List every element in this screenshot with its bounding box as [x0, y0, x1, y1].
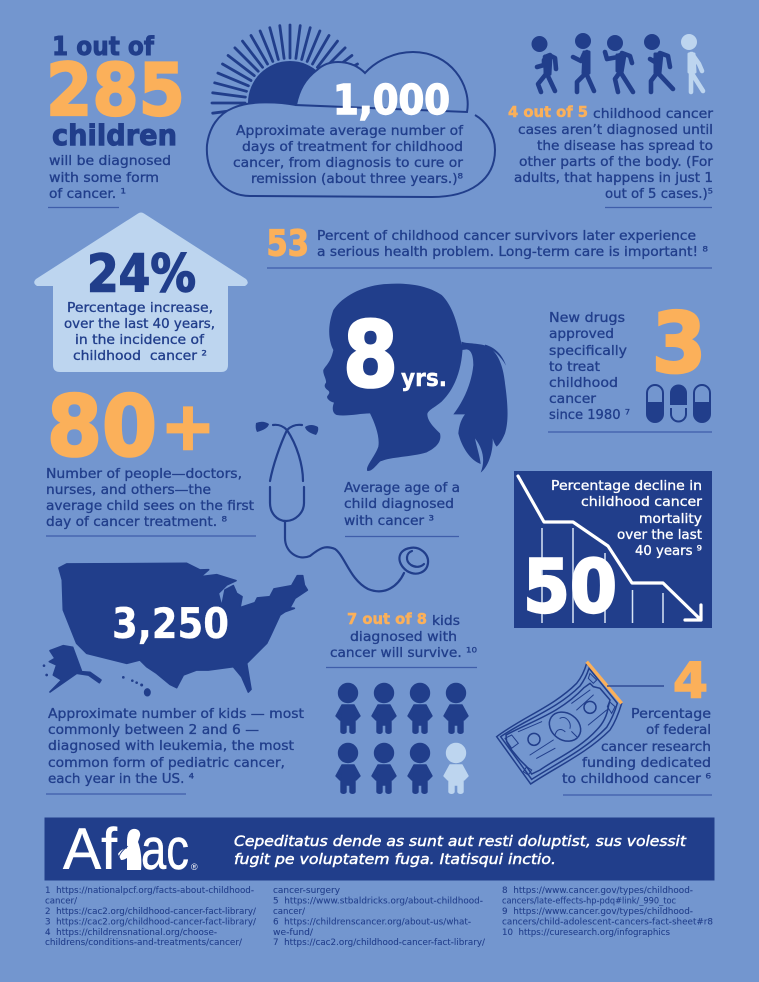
text: survivors description: a serious health problem. Long-term care is important! ⁸ [317, 245, 708, 260]
chart bars [542, 528, 663, 623]
panel: girl 8 yrs [323, 284, 508, 473]
big number: 3: 3 [652, 295, 706, 392]
footnotes: column three: 9 https://www.cancer.gov/types/childhood- [502, 906, 693, 917]
icon: sun rays behind cloud [212, 25, 358, 145]
icon: cloud outline [207, 52, 495, 197]
text: leukemia description: commonly between 2 and 6 — [48, 723, 259, 738]
panel: 3 new drugs [548, 295, 712, 432]
text: will be diagnosed: of cancer. ¹ [49, 187, 126, 202]
chart line arrow [518, 476, 701, 620]
logo: Aflac: ac [141, 817, 189, 882]
text: decline description: mortality [639, 512, 702, 527]
chart background [514, 471, 712, 628]
footnotes: column three [502, 885, 713, 938]
text: funding description [562, 707, 711, 787]
panel: 7 out of 8 kids [326, 610, 477, 793]
footnotes: column one: 1 https://nationalpcf.org/facts-about-childhood- [45, 885, 254, 896]
slogan: Cepeditatus dende as sunt aut resti doluptist, sus volessit [234, 834, 687, 850]
text: new drugs description: since 1980 ⁷ [549, 408, 630, 423]
text: decline description: 40 years ⁹ [635, 544, 702, 559]
big number: 53: 53 [266, 224, 309, 264]
big number: 4: 4 [673, 652, 708, 710]
icon: row of children bottom [336, 744, 468, 793]
text: new drugs description: cancer [549, 392, 597, 407]
text: leukemia description [48, 707, 304, 787]
text: 4 out of 5 description: other parts of the body. (For [519, 155, 714, 170]
footnotes: column one: 2 https://cac2.org/childhood-cancer-fact-library/ [45, 906, 257, 917]
text: 4 out of 5 description: 4 out of 5 [508, 103, 588, 121]
big symbol: plus: + [161, 388, 215, 465]
text: funding description: of federal [646, 723, 711, 738]
text: cloud description: Approximate average number of [236, 124, 463, 139]
panel: average age text [344, 481, 460, 536]
text: funding description: Percentage [631, 707, 711, 722]
text: decline description: childhood cancer [581, 495, 703, 510]
text: will be diagnosed: with some form [49, 171, 159, 186]
footnotes: column one: childrens/conditions-and-treatments/cancer/ [45, 937, 243, 948]
big number: 1,000: 1,000 [333, 76, 450, 124]
text: survivors description [317, 229, 708, 260]
big number: 24%: 24% [87, 244, 196, 304]
text: funding description: to childhood cancer ⁶ [562, 772, 711, 787]
footnotes: column two: 7 https://cac2.org/childhood-cancer-fact-library/ [273, 937, 486, 948]
banner background [44, 818, 714, 880]
text: funding description: cancer research [601, 740, 711, 755]
text: new drugs description: to treat [549, 360, 600, 375]
text: 4 out of 5 description: the disease has spread to [537, 139, 713, 154]
text: decline description: over the last [617, 528, 702, 543]
heading: children: children [52, 119, 177, 152]
logo: Aflac: Af [63, 817, 118, 882]
text: people description: average child sees on the first [46, 499, 254, 514]
footnotes: column three: cancers/child-adolescent-cancers-fact-sheet#r8 [502, 916, 713, 928]
text: incidence description: childhood cancer ² [73, 349, 207, 364]
banner: Aflac [44, 817, 714, 882]
big number: 8: 8 [343, 303, 398, 408]
text: leukemia description: diagnosed with leukemia, the most [48, 739, 294, 754]
footnotes: column one: 4 https://childrensnational.org/choose- [45, 927, 217, 938]
panel: average age text: with cancer ³ [344, 514, 434, 529]
heading: 1 out of: 1 out of [52, 32, 155, 62]
footnotes: column two: cancer/ [273, 906, 306, 917]
text: survivors description: Percent of childhood cancer survivors later experience [317, 229, 696, 244]
footnotes: column three: 10 https://curesearch.org/infographics [502, 927, 670, 938]
text: 4 out of 5 description: cases aren’t diagnosed until [518, 123, 713, 138]
text: survival description: cancer will survive. ¹⁰ [330, 646, 477, 661]
text: cloud description: days of treatment for childhood [242, 140, 463, 155]
footnotes: column one: cancer/ [45, 896, 78, 906]
panel: cloud with 1,000 days [207, 52, 495, 197]
text: survival description: diagnosed with [350, 630, 457, 645]
text: 4 out of 5 description: childhood cancer [593, 107, 714, 122]
slogan: fugit pe voluptatem fuga. Itatisqui inctio. [234, 852, 556, 868]
text: cloud description: cancer, from diagnosis to cure or [233, 156, 464, 171]
text: leukemia description: Approximate number of kids — most [48, 707, 304, 722]
text: incidence description [64, 301, 215, 364]
logo: Aflac [63, 817, 198, 882]
text: people description: nurses, and others—the [46, 483, 211, 498]
text: new drugs description [549, 311, 630, 423]
big number: 3,250: 3,250 [112, 599, 229, 648]
text: incidence description: Percentage increase, [67, 301, 213, 316]
panel: average age text: Average age of a [344, 481, 460, 496]
orange band [587, 662, 622, 703]
panel: map 3,250 [43, 563, 307, 794]
text: incidence description: over the last 40 years, [64, 317, 215, 332]
text: survival description: kids [432, 614, 460, 629]
text: 4 out of 5 description: adults, that happens in just 1 [514, 171, 713, 186]
footnotes: column one: 3 https://cac2.org/childhood-cancer-fact-library/ [45, 916, 257, 928]
text: survival description [330, 610, 477, 661]
text: leukemia description: common form of pediatric cancer, [48, 756, 285, 771]
panel: house 24% [34, 212, 248, 372]
footnotes: column three: 8 https://www.cancer.gov/types/childhood- [502, 885, 693, 896]
icon: house shape [34, 212, 248, 372]
text: new drugs description: approved [549, 327, 614, 342]
panel: 80+ people [46, 378, 256, 536]
text: new drugs description: New drugs [549, 311, 625, 326]
text: incidence description: in the incidence of [75, 333, 204, 348]
panel: 4 out of 5 [508, 33, 714, 208]
text: 4 out of 5 description [508, 103, 714, 202]
big number: 50: 50 [523, 545, 617, 630]
text: people description [46, 467, 254, 530]
text: cloud description [233, 124, 464, 187]
label: yrs.: yrs. [401, 364, 447, 392]
icon: dollar bill [497, 663, 622, 784]
big number: 80: 80 [47, 378, 157, 476]
text: 4 out of 5 description: out of 5 cases.)⁵ [605, 187, 713, 202]
text: will be diagnosed: will be diagnosed [49, 154, 171, 169]
panel: average age text: child diagnosed [344, 497, 454, 512]
panel: 53 percent survivors [266, 224, 712, 268]
footnotes: column two: 6 https://childrenscancer.org/about-us/what- [273, 916, 471, 928]
icon: walking people [532, 33, 703, 92]
footnotes: column two: cancer-surgery [273, 885, 341, 896]
text: funding description: funding dedicated [582, 756, 711, 771]
text: people description: Number of people—doctors, [46, 467, 242, 482]
text: survival description: 7 out of 8 [347, 610, 427, 628]
panel: 50 percent decline chart [514, 471, 712, 630]
icon: girl silhouette [323, 284, 508, 473]
footnotes: column two [273, 885, 486, 948]
panel: 1 out of 285 children [46, 32, 185, 208]
icon: stethoscope [256, 422, 428, 591]
icon: cloud fill [207, 52, 495, 197]
icon: row of children top [336, 684, 468, 733]
map: United States [43, 563, 307, 696]
footnotes: column two: 5 https://www.stbaldricks.org/about-childhood- [273, 896, 483, 906]
footnotes: column three: cancers/late-effects-hp-pdq#link/_990_toc [502, 896, 676, 906]
footnotes: column one [45, 885, 257, 948]
text: people description: day of cancer treatment. ⁸ [46, 515, 227, 530]
icon: capsules [646, 384, 711, 423]
text: new drugs description: childhood [549, 376, 618, 391]
logo: Aflac: ® [191, 862, 198, 872]
slogan [234, 834, 687, 868]
text: new drugs description: specifically [549, 344, 627, 359]
footnotes: column two: we-fund/ [273, 927, 314, 938]
text: decline description [551, 479, 703, 559]
text: will be diagnosed [49, 154, 171, 202]
text: leukemia description: each year in the US. ⁴ [48, 772, 194, 787]
big number: 285: 285 [46, 48, 185, 132]
connector line [607, 685, 664, 687]
text: cloud description: remission (about three years.)⁸ [251, 172, 463, 187]
panel: 4 percent funding [497, 652, 712, 795]
text: decline description: Percentage decline in [551, 479, 702, 494]
